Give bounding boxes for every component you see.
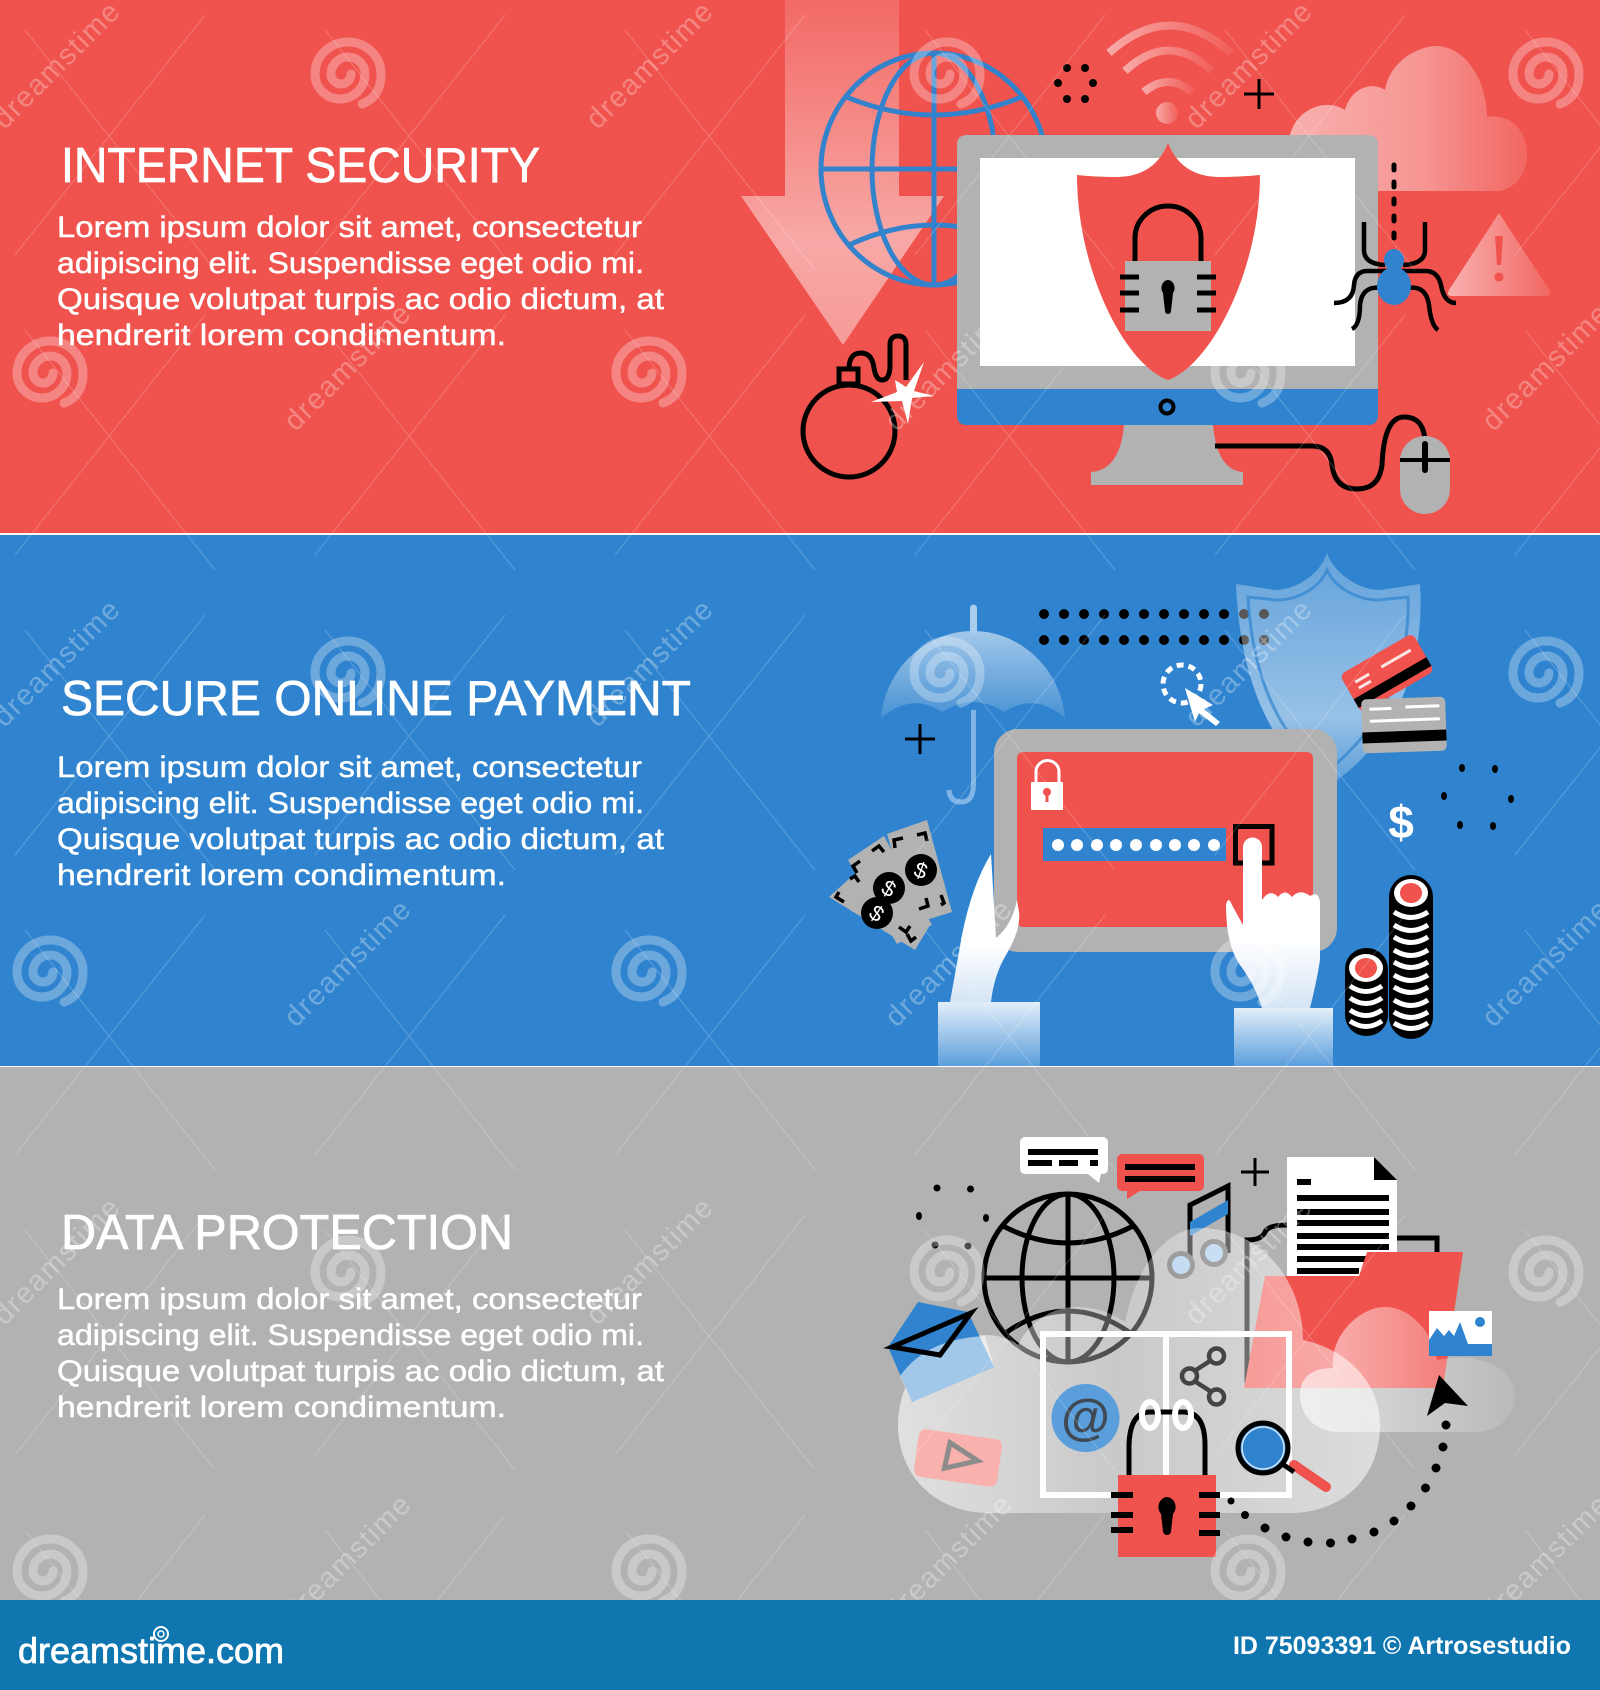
icon: white speech bubble xyxy=(1020,1137,1108,1183)
icon: folder back lines xyxy=(1247,1225,1437,1383)
icon: spark xyxy=(871,362,934,424)
icon: red speech bubble xyxy=(1117,1154,1204,1199)
icon: dotted lines xyxy=(1039,609,1269,645)
text block: data protection description: Quisque volutpat turpis ac odio dictum, at xyxy=(57,1355,665,1388)
icon: magnifier xyxy=(1238,1423,1326,1487)
text block: internet security description xyxy=(57,211,665,352)
watermark text: dreamstime xyxy=(278,298,417,437)
footer bar xyxy=(0,1600,1600,1690)
icon: music notes xyxy=(1170,1186,1228,1276)
watermark text: dreamstime xyxy=(580,594,719,733)
icon: shield with padlock xyxy=(1077,143,1260,380)
watermark text: dreamstime xyxy=(278,894,417,1033)
icon: dollar sign: $ xyxy=(1388,796,1414,848)
icon: grey credit card xyxy=(1361,697,1447,753)
icon: at sign: @ xyxy=(1061,1389,1110,1445)
icon: dotted circle xyxy=(1441,764,1514,830)
text block: internet security description: Lorem ipsum dolor sit amet, consectetur xyxy=(57,211,642,244)
icon: left hand xyxy=(938,854,1040,1066)
icon: red credit card xyxy=(1340,633,1434,713)
text block: data protection description: hendrerit lorem condimentum. xyxy=(57,1391,506,1424)
watermark text: dreamstime xyxy=(1179,0,1318,135)
icon: blue globe xyxy=(821,53,1047,285)
icon: share nodes xyxy=(1182,1348,1224,1404)
icon: mouse and cable xyxy=(1215,417,1450,514)
icon: dotted circle xyxy=(916,1184,989,1250)
password field xyxy=(1043,826,1272,863)
watermark text: dreamstime xyxy=(879,1489,1018,1628)
icon: envelope with paper plane xyxy=(888,1302,994,1402)
text block: internet security description: Quisque volutpat turpis ac odio dictum, at xyxy=(57,283,665,316)
text block: data protection description: Lorem ipsum dolor sit amet, consectetur xyxy=(57,1283,642,1316)
icon: cloud xyxy=(1283,46,1527,191)
text block: data protection description: adipiscing elit. Suspendisse eget odio mi. xyxy=(57,1319,644,1352)
panel: data protection xyxy=(0,1067,1600,1600)
panel: internet security xyxy=(0,0,1600,533)
icon: cursor with dashed circle xyxy=(1163,665,1220,726)
icon: right cloud xyxy=(1300,1307,1515,1432)
watermark text: dreamstime xyxy=(879,894,1018,1033)
icon: document xyxy=(1287,1157,1397,1276)
icon: tablet xyxy=(994,729,1337,952)
icon: wifi signal xyxy=(1109,26,1231,124)
watermark text: dreamstime xyxy=(580,1192,719,1331)
icon: warning triangle xyxy=(1448,213,1550,296)
icon: plus xyxy=(1241,1158,1269,1186)
icon: download arrow xyxy=(741,0,944,345)
text block: payment description: hendrerit lorem condimentum. xyxy=(57,859,506,892)
icon: bomb xyxy=(803,336,934,477)
icon: plus xyxy=(905,724,935,754)
icon: spider xyxy=(1334,165,1456,330)
watermark text: dreamstime xyxy=(1179,594,1318,733)
watermark text: dreamstime xyxy=(1179,1192,1318,1331)
heading: secure online payment: SECURE ONLINE PAYMENT xyxy=(61,672,691,726)
text block: payment description: Quisque volutpat turpis ac odio dictum, at xyxy=(57,823,665,856)
watermark text: dreamstime xyxy=(580,0,719,135)
icon: banknotes: $ xyxy=(865,900,889,927)
icon: banknotes: $ xyxy=(877,875,900,902)
heading: data protection: DATA PROTECTION xyxy=(61,1206,513,1260)
icon: umbrella xyxy=(881,608,1065,802)
icon: large cloud xyxy=(898,1228,1380,1513)
icon: banknotes: $ xyxy=(911,857,931,884)
heading: internet security: INTERNET SECURITY xyxy=(61,139,540,193)
icon: black globe xyxy=(984,1194,1152,1362)
icon: at sign xyxy=(1052,1384,1120,1452)
icon: small padlock xyxy=(1031,761,1063,810)
icon: red folder xyxy=(1244,1252,1463,1388)
text block: payment description: adipiscing elit. Suspendisse eget odio mi. xyxy=(57,787,644,820)
icon: red padlock xyxy=(1111,1402,1220,1557)
footer logo: dreamstime.com xyxy=(18,1630,284,1671)
icon: coin stacks xyxy=(1345,875,1433,1039)
icon: video play badge xyxy=(913,1428,1003,1488)
icon: window frame xyxy=(1043,1334,1289,1495)
icon: right hand pointing xyxy=(1226,838,1333,1066)
text block: payment description xyxy=(57,751,665,892)
footer credit: ID 75093391 © Artrosestudio xyxy=(1233,1632,1571,1660)
watermark text: dreamstime xyxy=(278,1489,417,1628)
icon: monitor xyxy=(957,135,1378,485)
text block: payment description: Lorem ipsum dolor sit amet, consectetur xyxy=(57,751,642,784)
text block: internet security description: adipiscing elit. Suspendisse eget odio mi. xyxy=(57,247,644,280)
icon: banknotes xyxy=(829,820,952,950)
icon: large pale shield xyxy=(1236,553,1421,787)
icon: dotted circle xyxy=(1054,64,1097,103)
icon: dotted curved arrow xyxy=(1228,1375,1468,1548)
watermark text: dreamstime xyxy=(879,298,1018,437)
text block: internet security description: hendrerit lorem condimentum. xyxy=(57,319,506,352)
panel: secure online payment xyxy=(0,535,1600,1066)
icon: plus xyxy=(1244,79,1274,109)
icon: image tile xyxy=(1429,1311,1492,1356)
text block: data protection description xyxy=(57,1283,665,1424)
